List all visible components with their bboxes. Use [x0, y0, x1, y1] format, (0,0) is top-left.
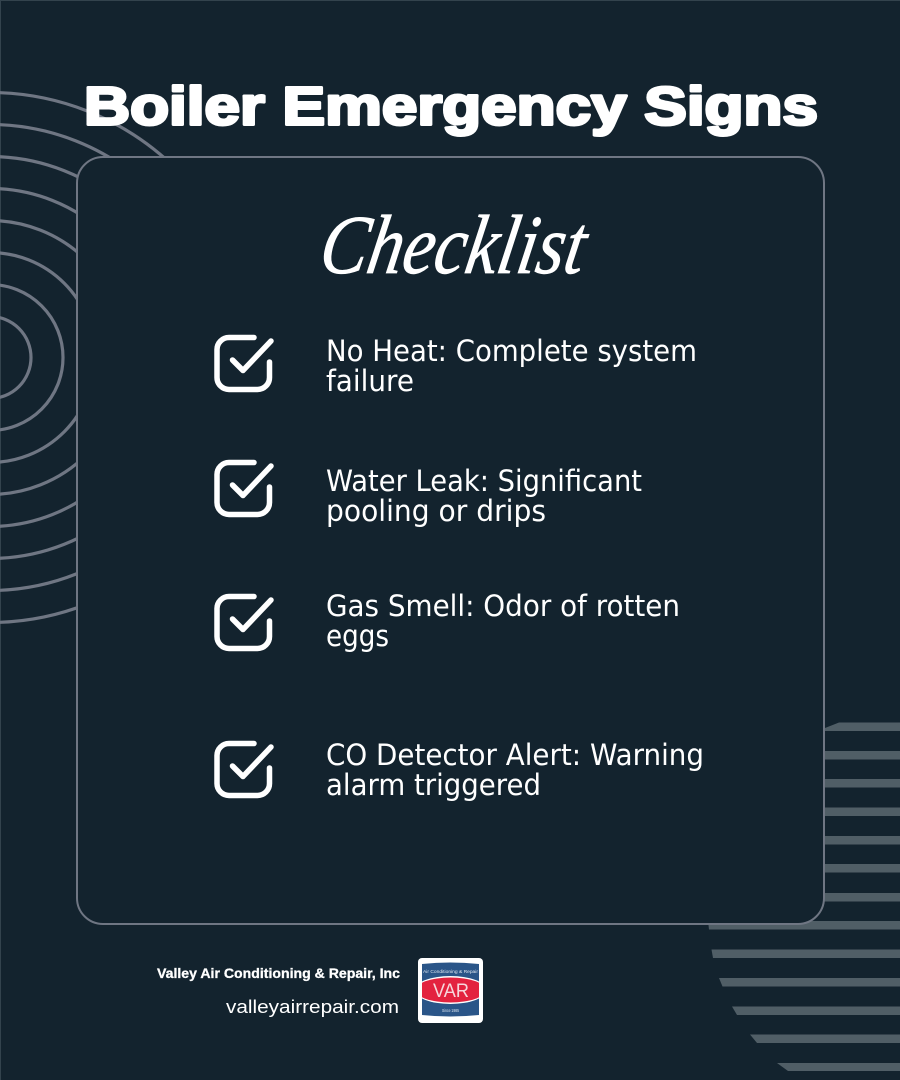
icon: company logo: Air Conditioning & Repair: [423, 969, 479, 974]
icon: company logo: [414, 958, 486, 1023]
text: No Heat: No Heat: Complete system: [326, 334, 697, 368]
text: No Heat: failure: [326, 364, 414, 398]
checklist item: Gas Smell: [217, 589, 680, 653]
checklist item: CO Detector: [217, 738, 704, 802]
checklist item: No Heat: [217, 334, 697, 398]
icon: company logo: Since 1985: [442, 1008, 459, 1013]
icon: checkbox: [217, 338, 271, 390]
text: Gas Smell: Gas Smell: Odor of rotten: [326, 589, 680, 623]
concentric arcs decoration: [0, 92, 255, 622]
striped circle decoration: [708, 722, 900, 1071]
icon: checkbox: [217, 596, 271, 648]
company name: Valley Air Conditioning & Repair, Inc: [157, 966, 401, 981]
text: CO Detector: alarm triggered: [326, 768, 541, 802]
icon: checkbox: [217, 744, 271, 796]
checklist item: Water Leak: [217, 462, 642, 528]
icon: company logo: VAR: [433, 981, 469, 1002]
text: CO Detector: CO Detector Alert: Warning: [326, 738, 704, 772]
heading: Checklist: Checklist: [314, 200, 596, 292]
panel: checklist card: [77, 157, 824, 924]
icon: checkbox: [217, 462, 271, 514]
title: Boiler Emergency Signs: [84, 76, 818, 136]
text: Gas Smell: eggs: [326, 619, 389, 653]
website: valleyairrepair.com: [226, 997, 399, 1017]
text: Water Leak: pooling or drips: [326, 494, 546, 528]
text: Water Leak: Water Leak: Significant: [326, 464, 642, 498]
